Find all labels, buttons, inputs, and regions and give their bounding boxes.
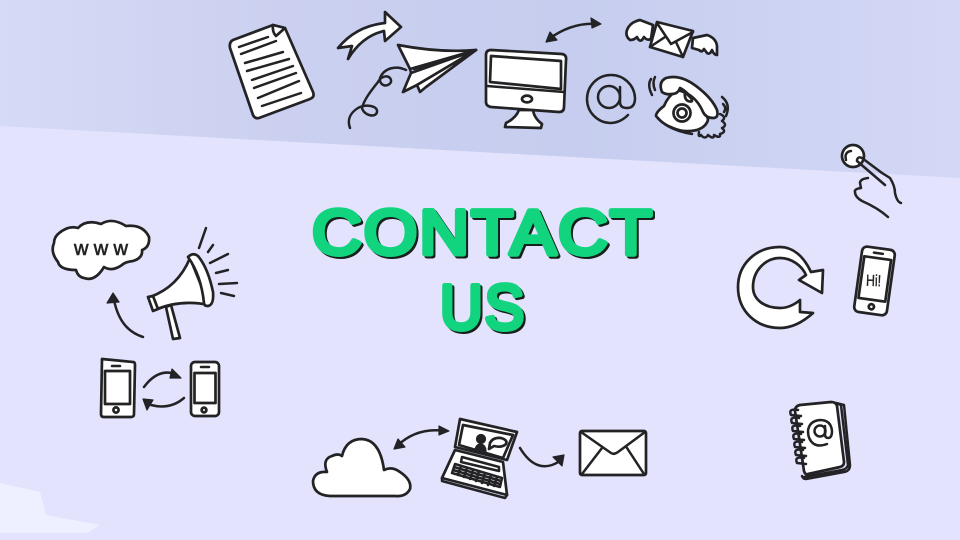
icon: winged envelope (626, 20, 717, 57)
icon: two phones exchanging (101, 359, 219, 417)
left phone (101, 359, 135, 417)
icon: rotary telephone (649, 77, 728, 138)
icon: cloud bottom (313, 439, 410, 496)
icon: finger pressing button (842, 145, 901, 217)
icon: envelope (580, 431, 646, 475)
icon: spiral address notebook (790, 402, 850, 479)
icon: paper plane with trail (349, 45, 476, 128)
right phone (191, 362, 219, 416)
title (312, 198, 654, 343)
arrow: cloud to laptop (394, 426, 449, 449)
icon: at sign (587, 75, 635, 123)
icon: curved arrow (338, 12, 401, 59)
icon: phone saying Hi (854, 246, 895, 316)
title line: US: US (440, 273, 526, 343)
icon: double arrow top (546, 18, 601, 42)
icon: document (230, 25, 314, 118)
icon: computer monitor (486, 50, 566, 128)
icon: megaphone (148, 228, 237, 339)
icon: refresh arrow (738, 247, 823, 328)
exchange arrows (143, 369, 184, 410)
text: www: www (73, 238, 129, 260)
arrow: laptop to envelope (520, 448, 564, 466)
title line: CONTACT: CONTACT (312, 198, 654, 268)
text: Hi!: Hi! (866, 273, 881, 290)
lower-left light shape (0, 483, 100, 533)
icon: www cloud (53, 221, 149, 279)
arrow: megaphone to cloud (107, 293, 143, 337)
icon: laptop (442, 419, 517, 498)
top background band (0, 0, 960, 178)
